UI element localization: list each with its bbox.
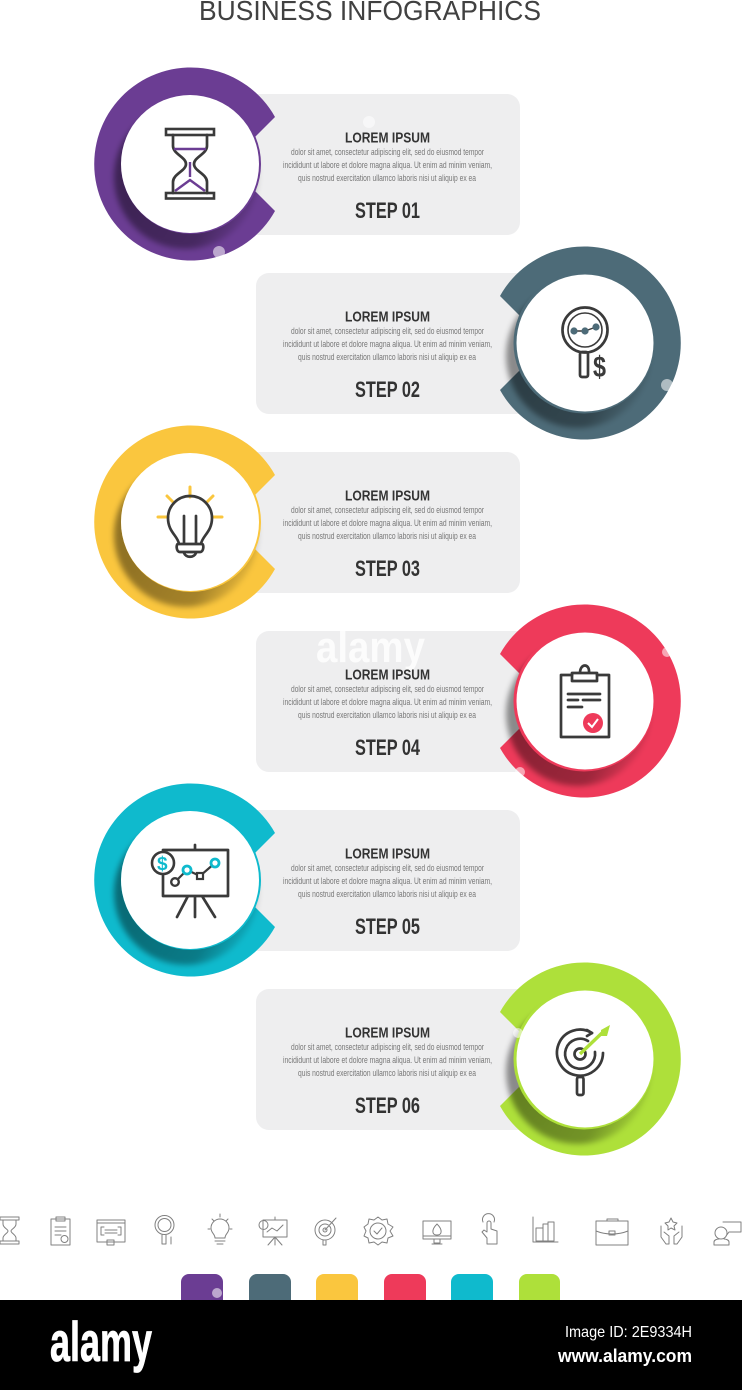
panel: step 05 (94, 784, 520, 976)
label: step 05: STEP 05 (355, 914, 420, 939)
body: step 01 (283, 147, 492, 184)
body: step 03: incididunt ut labore et dolore magna aliqua. Ut enim ad minim veniam, (283, 518, 492, 529)
heading: step 05: LOREM IPSUM (345, 846, 430, 862)
watermark marks (212, 116, 673, 1298)
small icon: magnifier (155, 1216, 174, 1244)
disc: step 05 (121, 811, 259, 949)
panel: step 02 (256, 246, 681, 439)
icon: light bulb (158, 487, 222, 557)
heading: step 06: LOREM IPSUM (345, 1024, 430, 1042)
label: step 06: STEP 06 (355, 1093, 420, 1118)
disc: step 02 (516, 274, 654, 412)
swatch: red (384, 1274, 426, 1308)
image id: Image ID: 2E9334H (565, 1324, 692, 1341)
small icon: touch hand (482, 1214, 497, 1244)
footer logo: alamy (50, 1310, 152, 1373)
label: step 03: STEP 03 (355, 556, 420, 581)
ring: step 06 (500, 962, 681, 1156)
swatch: yellow (316, 1274, 358, 1308)
card: step 02 (256, 273, 546, 414)
panel: step 03 (94, 426, 520, 618)
swatch: green (519, 1274, 560, 1308)
small icon: presentation board (259, 1217, 287, 1245)
icon: magnifier with dollar (562, 308, 608, 384)
website: www.alamy.com (557, 1346, 692, 1366)
ring: step 03 (94, 426, 275, 618)
ring: step 05 (94, 784, 275, 976)
body: step 04: quis nostrud exercitation ullamco laboris nisi ut aliquip ex ea (298, 710, 476, 721)
colour swatches (181, 1274, 560, 1308)
heading: step 04: LOREM IPSUM (345, 666, 430, 684)
ring: step 02 (500, 246, 681, 439)
label: step 02: STEP 02 (355, 377, 420, 402)
body: step 05: quis nostrud exercitation ullamco laboris nisi ut aliquip ex ea (298, 889, 476, 900)
card: step 04 (256, 631, 546, 772)
ring: step 01 (94, 68, 275, 260)
small icon: hands and star (661, 1218, 682, 1244)
small icon: bar chart (533, 1217, 558, 1242)
body: step 02: dolor sit amet, consectetur adipiscing elit, sed do eiusmod tempor (291, 326, 484, 337)
body: step 05: dolor sit amet, consectetur adipiscing elit, sed do eiusmod tempor (291, 863, 484, 874)
disc: step 06 (516, 990, 654, 1128)
small icon: gear (364, 1217, 393, 1245)
watermark: alamy: alamy (316, 623, 425, 672)
icon: magnifier with dollar: $ (593, 351, 606, 384)
body: step 03 (283, 505, 492, 542)
label: step 04: STEP 04 (355, 735, 421, 760)
footer bar (0, 1300, 742, 1390)
heading: step 03: LOREM IPSUM (345, 488, 430, 504)
card: step 05 (235, 810, 520, 951)
small icon: person with speech bubble (714, 1222, 741, 1245)
body: step 06: incididunt ut labore et dolore magna aliqua. Ut enim ad minim veniam, (283, 1055, 492, 1066)
small icon: target (315, 1218, 336, 1245)
disc: step 04 (516, 632, 654, 770)
panel: step 01 (94, 68, 520, 260)
icon: presentation board (152, 845, 228, 917)
swatch: slate (249, 1274, 291, 1308)
small icon: clipboard (51, 1217, 70, 1245)
disc: step 03 (121, 453, 259, 591)
disc: step 01 (121, 95, 259, 233)
small icon: bulb (208, 1214, 232, 1244)
body: step 02: incididunt ut labore et dolore magna aliqua. Ut enim ad minim veniam, (283, 339, 492, 350)
small icon: certificate window (97, 1220, 125, 1245)
swatch: purple (181, 1274, 223, 1308)
card: step 03 (235, 452, 520, 593)
body: step 05: incididunt ut labore et dolore magna aliqua. Ut enim ad minim veniam, (283, 876, 492, 887)
card: step 01 (235, 94, 520, 235)
small icon: hourglass (0, 1217, 19, 1244)
icon: presentation board: $ (157, 854, 168, 875)
label: step 01: STEP 01 (355, 198, 420, 223)
body: step 04: dolor sit amet, consectetur adipiscing elit, sed do eiusmod tempor (291, 684, 484, 695)
small icon: monitor with money bag (423, 1221, 451, 1244)
body: step 01: dolor sit amet, consectetur adipiscing elit, sed do eiusmod tempor (291, 147, 484, 158)
body: step 06: dolor sit amet, consectetur adipiscing elit, sed do eiusmod tempor (291, 1042, 484, 1053)
body: step 03: dolor sit amet, consectetur adipiscing elit, sed do eiusmod tempor (291, 505, 484, 516)
panel: step 04 (256, 604, 681, 798)
ring: step 04 (500, 604, 681, 798)
heading: step 01: LOREM IPSUM (345, 130, 430, 146)
icon: target and arrow (557, 1025, 610, 1095)
icon row (0, 1214, 741, 1245)
panel: step 06 (256, 962, 681, 1156)
body: step 04 (283, 684, 492, 721)
body: step 06 (283, 1042, 492, 1079)
body: step 06: quis nostrud exercitation ullamco laboris nisi ut aliquip ex ea (298, 1068, 476, 1079)
icon: hourglass (166, 129, 214, 198)
small icon: briefcase (596, 1219, 628, 1245)
body: step 02 (283, 326, 492, 363)
body: step 05 (283, 863, 492, 900)
body: step 01: incididunt ut labore et dolore magna aliqua. Ut enim ad minim veniam, (283, 160, 492, 171)
swatch: cyan (451, 1274, 493, 1308)
body: step 03: quis nostrud exercitation ullamco laboris nisi ut aliquip ex ea (298, 531, 476, 542)
card: step 06 (256, 989, 546, 1130)
body: step 02: quis nostrud exercitation ullamco laboris nisi ut aliquip ex ea (298, 352, 476, 363)
body: step 04: incididunt ut labore et dolore magna aliqua. Ut enim ad minim veniam, (283, 697, 492, 708)
icon: clipboard (561, 666, 609, 737)
heading: step 02: LOREM IPSUM (345, 308, 430, 326)
body: step 01: quis nostrud exercitation ullamco laboris nisi ut aliquip ex ea (298, 173, 476, 184)
